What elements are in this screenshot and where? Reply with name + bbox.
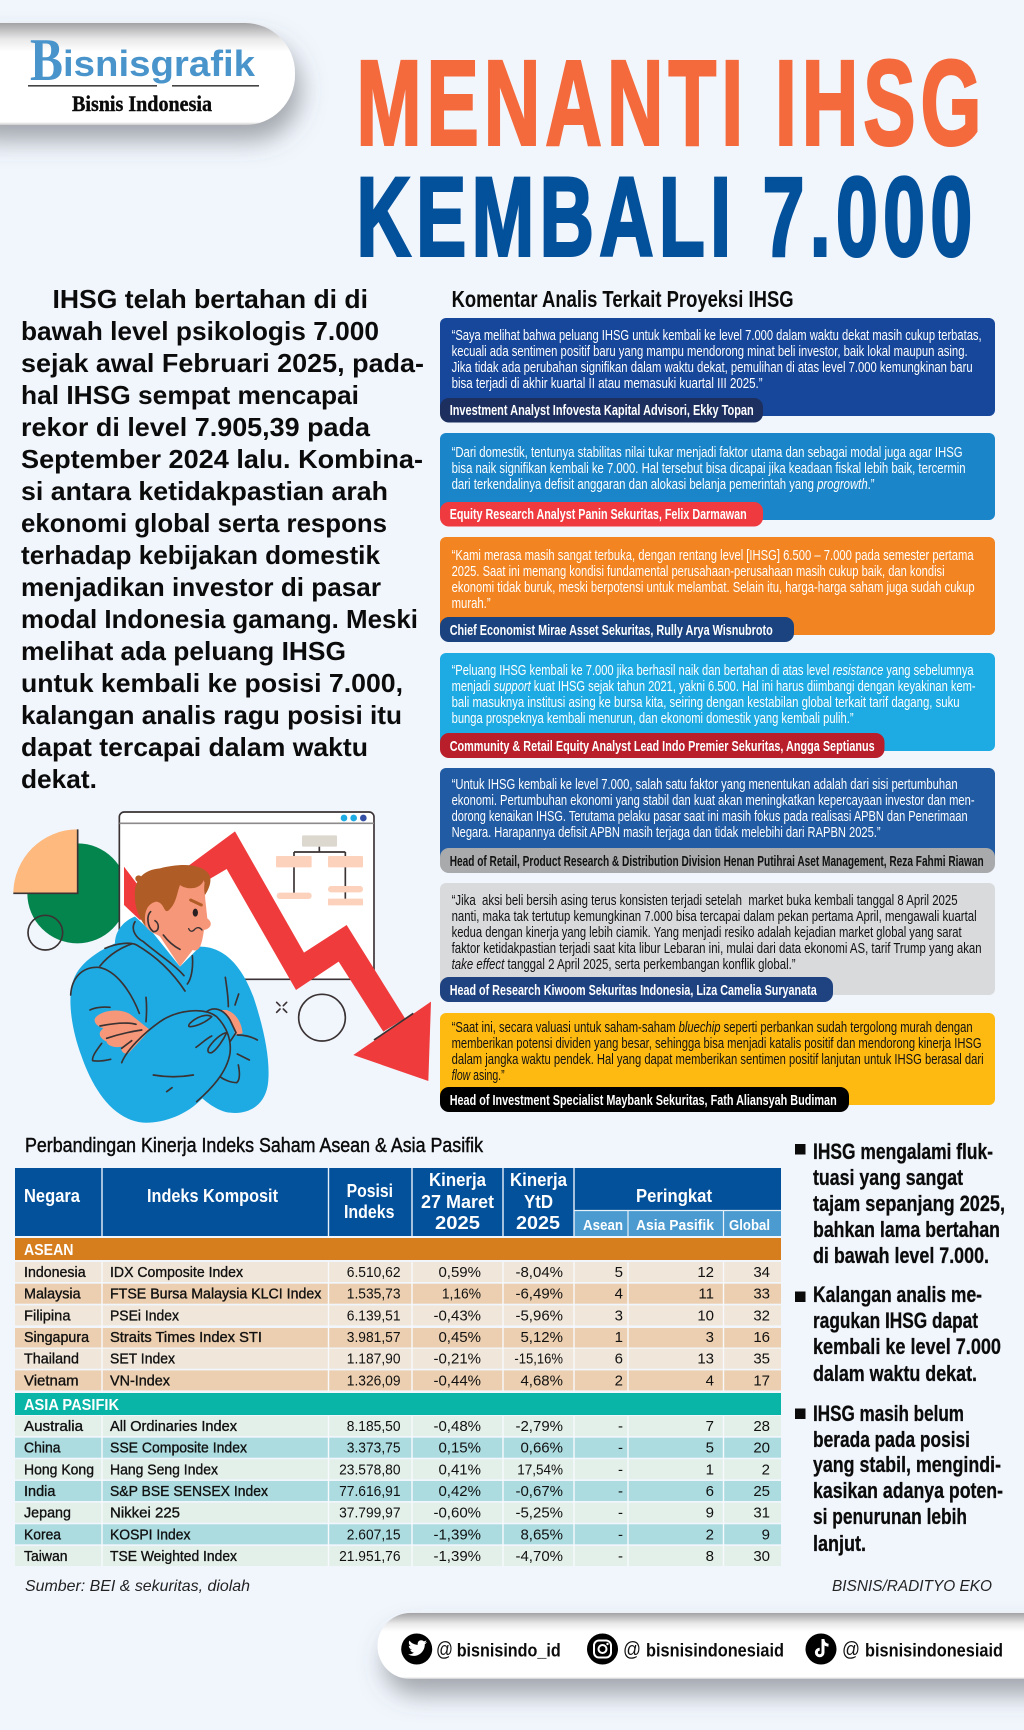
analyst label xyxy=(440,848,995,873)
panel: quote Liza Camelia Suryanata xyxy=(440,883,995,1002)
panel: quote Rully Arya Wisnubroto: murah.” xyxy=(452,596,491,612)
icon: small cross and circle xyxy=(277,994,345,1041)
row: Singapura: Straits Times Index STI xyxy=(110,1329,262,1346)
intro text block: melihat ada peluang IHSG xyxy=(21,636,346,666)
logo pill: Bisnisgrafik: B xyxy=(30,27,63,93)
intro text block: untuk kembali ke posisi 7.000, xyxy=(21,668,403,698)
row: Hong Kong xyxy=(15,1459,781,1479)
row: Singapura: 3 xyxy=(706,1329,714,1346)
row: India: 0,42% xyxy=(438,1483,481,1500)
row: Indonesia: IDX Composite Index xyxy=(110,1264,243,1281)
icon: twitter xyxy=(401,1634,432,1664)
row: China: - xyxy=(618,1440,623,1457)
heading: analyst comments: Komentar Analis Terkait Proyeksi IHSG xyxy=(452,286,794,312)
section band: ASEAN: ASEAN xyxy=(24,1242,74,1259)
title xyxy=(356,34,986,280)
row: Indonesia: 12 xyxy=(697,1264,714,1281)
row: Australia: 8.185,50 xyxy=(347,1419,400,1435)
row: Indonesia: 6.510,62 xyxy=(347,1265,400,1281)
row: Indonesia: 0,59% xyxy=(438,1264,481,1281)
icon: green circle with peach quarter xyxy=(13,829,127,950)
intro text block: menjadikan investor di pasar xyxy=(21,572,381,602)
panel: quote Angga Septianus: bunga prospeknya kembali menurun, dan ekonomi domestik yang kembali pulih.” xyxy=(452,711,854,727)
arrow: red falling trend xyxy=(124,831,431,1081)
footer social media pill xyxy=(378,1613,1024,1679)
tiktok handle: bisnisindonesiaid xyxy=(865,1640,1003,1660)
row: Jepang: -5,25% xyxy=(515,1505,563,1522)
row: Jepang: 9 xyxy=(706,1505,714,1522)
browser window xyxy=(119,812,374,979)
row: Jepang: Nikkei 225 xyxy=(110,1505,180,1522)
row: India: 25 xyxy=(753,1483,770,1500)
row: Korea: Korea xyxy=(24,1526,62,1543)
row: India xyxy=(15,1481,781,1501)
analyst label: Investment Analyst Infovesta Kapital Advisori, Ekky Topan xyxy=(450,402,754,419)
row: Taiwan: 21.951,76 xyxy=(339,1549,400,1565)
analyst label: Head of Research Kiwoom Sekuritas Indonesia, Liza Camelia Suryanata xyxy=(450,982,817,999)
row: Korea: - xyxy=(618,1526,623,1543)
row: Thailand: 6 xyxy=(615,1351,623,1368)
row: Malaysia: 1.535,73 xyxy=(347,1286,400,1303)
row: India: 77.616,91 xyxy=(339,1484,400,1500)
table header: Asia Pasifik xyxy=(636,1218,715,1234)
row: Thailand: 1.187,90 xyxy=(347,1351,400,1368)
row: Vietnam: 1.326,09 xyxy=(347,1373,400,1390)
panel: quote Rully Arya Wisnubroto xyxy=(440,537,995,642)
row: Thailand xyxy=(15,1349,781,1369)
intro text block: ekonomi global serta respons xyxy=(21,508,387,538)
row: Taiwan: TSE Weighted Index xyxy=(110,1548,237,1565)
analyst label xyxy=(440,617,794,642)
panel: quote Felix Darmawan xyxy=(440,433,995,526)
row: Taiwan: 30 xyxy=(753,1548,770,1565)
table header: Posisi xyxy=(347,1180,393,1201)
row: Australia: 7 xyxy=(706,1418,714,1435)
row: Malaysia: 11 xyxy=(698,1286,714,1303)
row: Vietnam: Vietnam xyxy=(24,1372,79,1389)
row: Hong Kong: 0,41% xyxy=(438,1461,481,1478)
bullet: analyst doubts: Kalangan analis me- xyxy=(813,1282,982,1307)
row: Jepang: Jepang xyxy=(24,1505,71,1522)
table header: Kinerja xyxy=(510,1169,568,1190)
intro text block: September 2024 lalu. Kombina- xyxy=(21,444,423,474)
panel: quote Ekky Topan: bisa terjadi di akhir kuartal II atau memasuki kuartal III 2025.” xyxy=(452,376,763,392)
row: Jepang: -0,60% xyxy=(433,1505,481,1522)
row: Filipina: 32 xyxy=(753,1307,770,1324)
analyst label xyxy=(440,502,763,526)
intro text block: modal Indonesia gamang. Meski xyxy=(21,604,418,634)
row: India: - xyxy=(618,1483,623,1500)
intro text block: terhadap kebijakan domestik xyxy=(21,540,381,570)
row: Malaysia: 4 xyxy=(615,1286,623,1303)
row: Jepang: 37.799,97 xyxy=(339,1505,400,1522)
row: Jepang xyxy=(15,1503,781,1523)
row: Taiwan xyxy=(15,1546,781,1566)
row: Malaysia: 1,16% xyxy=(442,1286,481,1303)
icon: tiktok xyxy=(806,1634,836,1664)
table header: Kinerja xyxy=(429,1169,487,1190)
heading: table title: Perbandingan Kinerja Indeks Saham Asean & Asia Pasifik xyxy=(25,1135,484,1157)
logo pill: Bisnisgrafik: Bisnis Indonesia xyxy=(72,91,212,116)
bullet: not stable: si penurunan lebih xyxy=(813,1504,967,1529)
panel: quote Fath Aliansyah Budiman xyxy=(440,1013,995,1112)
table header: Negara xyxy=(24,1185,81,1206)
row: Jepang: 31 xyxy=(753,1505,770,1522)
intro text block: si antara ketidakpastian arah xyxy=(21,476,388,506)
illustration: worried man and falling chart xyxy=(13,812,431,1123)
row: Hong Kong: 23.578,80 xyxy=(339,1462,400,1478)
row: Filipina: 10 xyxy=(697,1307,714,1324)
row: Vietnam: VN-Index xyxy=(110,1372,170,1389)
row: Filipina: 6.139,51 xyxy=(347,1308,400,1325)
intro text block: dapat tercapai dalam waktu xyxy=(21,732,368,762)
table header: Peringkat xyxy=(636,1185,712,1206)
row: Australia xyxy=(15,1416,781,1436)
bullet: not stable: IHSG masih belum xyxy=(813,1401,964,1426)
logo pill: Bisnisgrafik: isnisgrafik xyxy=(63,43,256,84)
analyst label xyxy=(440,1087,849,1112)
intro text block: hal IHSG sempat mencapai xyxy=(21,380,359,410)
twitter handle: bisnisindo_id xyxy=(457,1640,561,1660)
section band: ASEAN xyxy=(15,1238,781,1260)
row: Filipina xyxy=(15,1305,781,1325)
bullet: not stable: lanjut. xyxy=(813,1531,866,1556)
row: Indonesia: 5 xyxy=(615,1264,623,1281)
row: China: SSE Composite Index xyxy=(110,1440,247,1457)
analyst label: Chief Economist Mirae Asset Sekuritas, Rully Arya Wisnubroto xyxy=(450,622,773,639)
row: Thailand: SET Index xyxy=(110,1351,175,1368)
logo pill: Bisnisgrafik xyxy=(0,23,295,125)
table header: YtD xyxy=(524,1191,553,1212)
row: Korea: -1,39% xyxy=(433,1526,481,1543)
row: China: 0,66% xyxy=(520,1440,563,1457)
table header: 2025 xyxy=(516,1212,560,1233)
table header: Asean xyxy=(583,1218,623,1234)
table header xyxy=(15,1168,781,1236)
table header: Indeks Komposit xyxy=(147,1185,278,1206)
intro text block: bawah level psikologis 7.000 xyxy=(21,316,379,346)
row: India: 6 xyxy=(706,1483,714,1500)
row: Taiwan: Taiwan xyxy=(24,1548,68,1565)
row: China: China xyxy=(24,1440,61,1457)
row: Taiwan: 8 xyxy=(706,1548,714,1565)
panel: quote Fath Aliansyah Budiman: flow asing.” xyxy=(452,1068,505,1084)
row: China: 5 xyxy=(706,1440,714,1457)
row: Malaysia: Malaysia xyxy=(24,1286,81,1303)
row: Singapura: Singapura xyxy=(24,1329,90,1346)
row: Vietnam xyxy=(15,1370,781,1390)
bullet: fluctuation xyxy=(795,1139,1005,1268)
section band: Asia Pasifik xyxy=(15,1393,781,1415)
row: Singapura: 16 xyxy=(753,1329,770,1346)
row: Australia: - xyxy=(618,1418,623,1435)
instagram handle: bisnisindonesiaid xyxy=(646,1640,784,1660)
row: China xyxy=(15,1438,781,1458)
row: Australia: 28 xyxy=(753,1418,770,1435)
row: Filipina: -5,96% xyxy=(515,1307,563,1324)
row: Indonesia: -8,04% xyxy=(515,1264,563,1281)
bullet: analyst doubts: dalam waktu dekat. xyxy=(813,1361,977,1386)
credit: BISNIS/RADITYO EKO xyxy=(832,1578,992,1595)
table header: Indeks xyxy=(344,1201,394,1222)
row: Hong Kong: 2 xyxy=(762,1461,770,1478)
row: India: India xyxy=(24,1483,56,1500)
panel: quote Ekky Topan xyxy=(440,318,995,422)
row: Singapura: 0,45% xyxy=(438,1329,481,1346)
row: Indonesia: 34 xyxy=(753,1264,770,1281)
bullet: analyst doubts: ragukan IHSG dapat xyxy=(813,1308,979,1333)
intro text block: sejak awal Februari 2025, pada- xyxy=(21,348,424,378)
row: Singapura: 1 xyxy=(615,1329,623,1346)
row: Malaysia xyxy=(15,1284,781,1304)
man with crossed arms xyxy=(70,865,269,1123)
row: Filipina: 3 xyxy=(615,1307,623,1324)
row: China: 0,15% xyxy=(438,1440,481,1457)
row: Filipina: Filipina xyxy=(24,1307,71,1324)
row: Taiwan: - xyxy=(618,1548,623,1565)
row: Thailand: 35 xyxy=(753,1351,770,1368)
analyst label: Equity Research Analyst Panin Sekuritas, Felix Darmawan xyxy=(450,506,747,523)
row: Jepang: - xyxy=(618,1505,623,1522)
row: Korea: 2.607,15 xyxy=(347,1527,400,1543)
row: Malaysia: -6,49% xyxy=(515,1286,563,1303)
row: Indonesia: Indonesia xyxy=(24,1264,86,1281)
intro text block: kalangan analis ragu posisi itu xyxy=(21,700,402,730)
intro text block: rekor di level 7.905,39 pada xyxy=(21,412,371,442)
row: Korea: 2 xyxy=(706,1526,714,1543)
bullet: fluctuation: tuasi yang sangat xyxy=(813,1165,964,1190)
bullet: not stable: berada pada posisi xyxy=(813,1427,970,1452)
panel: quote Reza Fahmi Riawan: Negara. Harapannya defisit APBN masih terjaga dan tidak melebihi dari RAPBN 2025.” xyxy=(452,825,881,841)
row: Korea xyxy=(15,1524,781,1544)
row: Thailand: Thailand xyxy=(24,1351,79,1368)
intro text block: IHSG telah bertahan di di xyxy=(52,284,368,314)
row: Australia: -2,79% xyxy=(515,1418,563,1435)
source note: Sumber: BEI & sekuritas, diolah xyxy=(25,1578,250,1595)
panel: quote Liza Camelia Suryanata: take effect tanggal 2 April 2025, serta perkembangan konflik global.” xyxy=(452,957,796,973)
bullet: analyst doubts xyxy=(795,1282,1001,1386)
row: Singapura: 5,12% xyxy=(520,1329,563,1346)
row: Vietnam: -0,44% xyxy=(433,1372,481,1389)
row: Thailand: -15,16% xyxy=(514,1350,563,1367)
row: Hong Kong: - xyxy=(618,1461,623,1478)
table header: 2025 xyxy=(435,1212,480,1233)
row: Malaysia: FTSE Bursa Malaysia KLCI Index xyxy=(110,1286,322,1303)
twitter handle xyxy=(436,1639,561,1661)
table header: Global xyxy=(729,1218,770,1234)
panel: quote Reza Fahmi Riawan xyxy=(440,768,995,873)
table: index performance xyxy=(15,1168,781,1566)
analyst label xyxy=(440,398,763,422)
bullet: not stable xyxy=(795,1401,1003,1556)
analyst label: Head of Investment Specialist Maybank Sekuritas, Fath Aliansyah Budiman xyxy=(450,1092,837,1109)
row: Korea: 8,65% xyxy=(520,1526,563,1543)
intro text block: dekat. xyxy=(21,764,97,794)
row: China: 20 xyxy=(753,1440,770,1457)
row: Hong Kong: Hang Seng Index xyxy=(110,1461,218,1478)
row: Singapura: 3.981,57 xyxy=(347,1330,400,1346)
row: Thailand: 13 xyxy=(697,1351,714,1368)
row: Hong Kong: 17,54% xyxy=(517,1462,563,1479)
row: China: 3.373,75 xyxy=(347,1440,400,1457)
row: Thailand: -0,21% xyxy=(433,1351,481,1368)
row: Malaysia: 33 xyxy=(753,1286,770,1303)
row: Vietnam: 4,68% xyxy=(520,1372,563,1389)
row: Vietnam: 17 xyxy=(753,1372,770,1389)
row: Vietnam: 2 xyxy=(615,1372,623,1389)
table header: 27 Maret xyxy=(421,1191,494,1212)
row: Singapura xyxy=(15,1328,781,1348)
row: Taiwan: -4,70% xyxy=(515,1548,563,1565)
section band: Asia Pasifik: ASIA PASIFIK xyxy=(24,1397,120,1414)
intro text block xyxy=(21,284,424,794)
row: Filipina: -0,43% xyxy=(433,1307,481,1324)
bullet: fluctuation: di bawah level 7.000. xyxy=(813,1243,989,1268)
twitter handle: @ xyxy=(436,1639,453,1661)
row: Australia: -0,48% xyxy=(433,1418,481,1435)
panel: quote Angga Septianus: “Peluang IHSG kembali ke 7.000 jika berhasil naik dan bertahan di atas level resistance yang sebelumnya xyxy=(452,663,974,679)
panel: quote Angga Septianus xyxy=(440,653,995,758)
analyst label xyxy=(440,733,884,758)
icon: instagram xyxy=(587,1634,618,1664)
row: Korea: KOSPI Index xyxy=(110,1526,191,1543)
row: Vietnam: 4 xyxy=(706,1372,714,1389)
row: Australia: All Ordinaries Index xyxy=(110,1418,237,1435)
row: India: S&P BSE SENSEX Index xyxy=(110,1483,268,1500)
analyst label xyxy=(440,977,833,1002)
row: Hong Kong: Hong Kong xyxy=(24,1461,94,1478)
instagram handle: @ xyxy=(623,1639,641,1661)
panel: quote Felix Darmawan: dari terkendalinya defisit anggaran dan alokasi belanja pemerintah yang progrowth.” xyxy=(452,477,875,493)
tiktok handle: @ xyxy=(842,1639,860,1661)
analyst label: Community & Retail Equity Analyst Lead Indo Premier Sekuritas, Angga Septianus xyxy=(450,738,875,755)
row: Filipina: PSEi Index xyxy=(110,1307,179,1324)
row: India: -0,67% xyxy=(515,1483,563,1500)
row: Hong Kong: 1 xyxy=(706,1461,714,1478)
row: Indonesia xyxy=(15,1262,781,1282)
row: Australia: Australia xyxy=(24,1418,84,1435)
row: Korea: 9 xyxy=(762,1526,770,1543)
row: Taiwan: -1,39% xyxy=(433,1548,481,1565)
